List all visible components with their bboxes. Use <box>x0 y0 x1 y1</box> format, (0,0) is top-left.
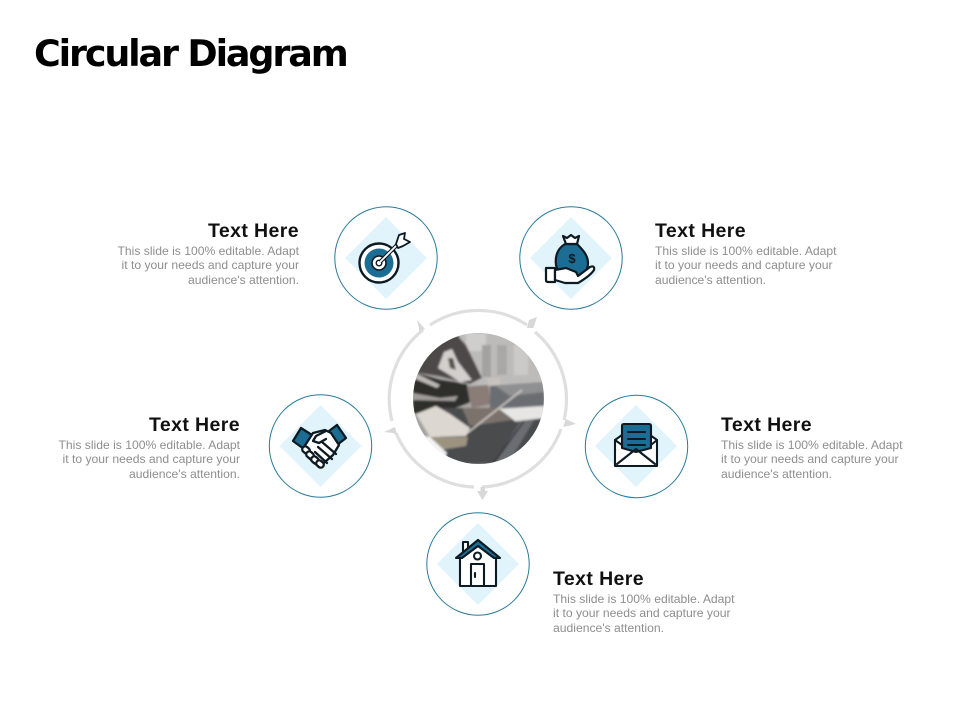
text block: left: audience's attention. <box>129 466 240 480</box>
icon: open envelope with letter <box>615 424 657 466</box>
text block: top left: Text Here <box>208 220 299 242</box>
arrowhead: top left <box>417 320 425 331</box>
icon: handshake <box>293 425 346 469</box>
text block: right: Text Here <box>721 414 812 436</box>
circle outline <box>427 513 529 615</box>
text block: top right: audience's attention. <box>655 272 766 286</box>
text block: right: This slide is 100% editable. Adapt <box>721 438 903 452</box>
text block: left <box>58 414 240 480</box>
diamond background <box>345 217 427 299</box>
text block: top right <box>655 220 837 286</box>
arrowhead: right <box>563 419 576 427</box>
circle outline <box>520 207 622 309</box>
text block: left: This slide is 100% editable. Adapt <box>58 438 240 452</box>
icon: target with arrow <box>360 233 410 282</box>
arrowhead: left <box>384 427 397 435</box>
icon: house <box>456 540 500 586</box>
text block: top right: Text Here <box>655 220 746 242</box>
circular arrows ring <box>384 310 576 500</box>
node: envelope <box>585 395 688 498</box>
icon: dollar sign: $ <box>568 251 576 266</box>
text block: bottom <box>553 568 735 634</box>
center photo <box>410 333 544 466</box>
text block: right: it to your needs and capture your <box>721 452 898 466</box>
text block: left: it to your needs and capture your <box>62 452 240 466</box>
diamond background <box>595 405 677 487</box>
node: target <box>335 207 437 309</box>
node: money bag <box>520 207 622 309</box>
arrowhead: bottom <box>477 487 488 500</box>
node: handshake <box>269 395 372 497</box>
circle outline <box>585 395 688 498</box>
node: house <box>427 513 529 615</box>
text block: bottom: it to your needs and capture your <box>553 606 730 620</box>
text block: right: audience's attention. <box>721 466 832 480</box>
text block: bottom: This slide is 100% editable. Adapt <box>553 592 735 606</box>
diamond background <box>530 217 612 299</box>
text block: right <box>721 414 903 480</box>
text block: top left <box>117 220 299 286</box>
text block: top right: it to your needs and capture your <box>655 258 832 272</box>
text block: bottom: Text Here <box>553 568 644 590</box>
text block: top left: it to your needs and capture your <box>122 258 299 272</box>
text block: left: Text Here <box>149 414 240 436</box>
icon: hand holding money bag <box>546 235 594 283</box>
arrowhead: top right <box>527 317 537 328</box>
text block: top left: audience's attention. <box>188 272 299 286</box>
text block: top left: This slide is 100% editable. Adapt <box>117 244 299 258</box>
diamond background <box>437 523 519 605</box>
circle outline <box>335 207 437 309</box>
text block: top right: This slide is 100% editable. Adapt <box>655 244 837 258</box>
title: Circular Diagram <box>34 32 347 75</box>
text block: bottom: audience's attention. <box>553 620 664 634</box>
diamond background <box>280 405 362 487</box>
circle outline <box>269 395 372 497</box>
